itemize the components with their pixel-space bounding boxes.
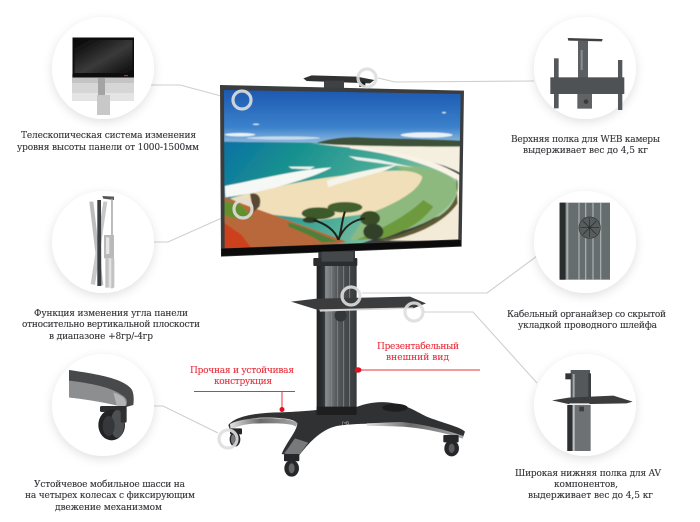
neck: [322, 252, 353, 262]
circle: top shelf: [534, 17, 636, 119]
surf: [225, 167, 332, 197]
text: height system: Телескопическая система изменения: [21, 131, 196, 141]
text: cable organiser: укладкой проводного шлейфа: [518, 321, 658, 331]
icon: shelf on column: [552, 370, 633, 451]
water: [220, 142, 460, 250]
panel: top shelf: [511, 17, 660, 156]
icon: tilted panel side view: [89, 196, 114, 288]
icon: caster wheel: [69, 370, 134, 440]
callout: sturdy construction: Прочная и устойчивая: [190, 366, 294, 376]
far land: [317, 137, 463, 147]
callout: presentable appearance: внешний вид: [386, 353, 449, 363]
text: chassis: Устойчевое мобильное шасси на: [34, 479, 186, 490]
panel: telescopic height system: [17, 17, 199, 153]
text: top shelf: выдерживает вес до 4,5 кг: [523, 146, 648, 156]
callout: presentable appearance: Презентабельный: [377, 341, 459, 352]
casters: [230, 428, 459, 477]
icon: monitor with height ghosts: [72, 38, 134, 115]
monitor: [220, 75, 467, 262]
panel: tilt function: [22, 191, 200, 342]
text: lower shelf: выдерживает вес до 4,5 кг: [528, 491, 653, 501]
icon: mount rear view: [550, 38, 624, 110]
text: tilt: Функция изменения угла панели: [34, 309, 188, 319]
text: height system: уровня высоты панели от 1000-1500мм: [17, 143, 199, 153]
text: tilt: [22, 309, 200, 342]
base: [228, 402, 465, 457]
circle: height system: [52, 17, 154, 119]
connector lines: [151, 78, 537, 433]
tree: [302, 207, 335, 219]
ring markers: [219, 69, 423, 448]
text: chassis: [25, 479, 195, 513]
text: lower shelf: компонентов,: [554, 480, 618, 490]
circle: tilt: [52, 191, 154, 293]
text: tilt: относительно вертикальной плоскости: [22, 320, 200, 330]
stand with base and shelf: [228, 248, 465, 477]
base: ƒ•B: [341, 420, 350, 426]
foreground cliff: [224, 196, 346, 248]
callout: sturdy construction: [190, 366, 295, 412]
text: lower shelf: [515, 469, 662, 501]
text: top shelf: [511, 135, 660, 156]
callout: presentable appearance: [354, 341, 480, 373]
text: lower shelf: Широкая нижняя полка для AV: [515, 469, 662, 479]
bezel: [220, 85, 464, 257]
text: cable organiser: [507, 309, 666, 331]
rear wheel: [397, 410, 405, 415]
text: height system: [17, 131, 199, 153]
panel: mobile chassis: [25, 354, 195, 513]
circle: chassis: [52, 354, 154, 456]
webcam shelf: [303, 75, 374, 89]
text: chassis: двежение механизмом: [55, 503, 162, 513]
white beach far: [310, 143, 463, 175]
panel: lower shelf: [515, 354, 662, 501]
lower right sand: [384, 180, 460, 242]
shelf: [291, 297, 426, 312]
circle: cable organiser: [534, 191, 636, 293]
sand: [230, 171, 422, 220]
circle: lower shelf: [534, 354, 636, 456]
panel: cable organiser: [507, 191, 666, 331]
column: [313, 248, 357, 415]
shallows green: [350, 165, 457, 241]
photo: beach: [220, 87, 467, 253]
text: tilt: в диапазоне +8гр/-4гр: [49, 332, 153, 342]
callout: sturdy construction: конструкция: [214, 377, 272, 387]
icon: column with vent: [559, 203, 610, 280]
text: cable organiser: Кабельный органайзер со скрытой: [507, 309, 666, 320]
text: top shelf: Верхняя полка для WEB камеры: [511, 135, 660, 145]
text: chassis: на четырех колесах с фиксирующим: [25, 491, 195, 501]
